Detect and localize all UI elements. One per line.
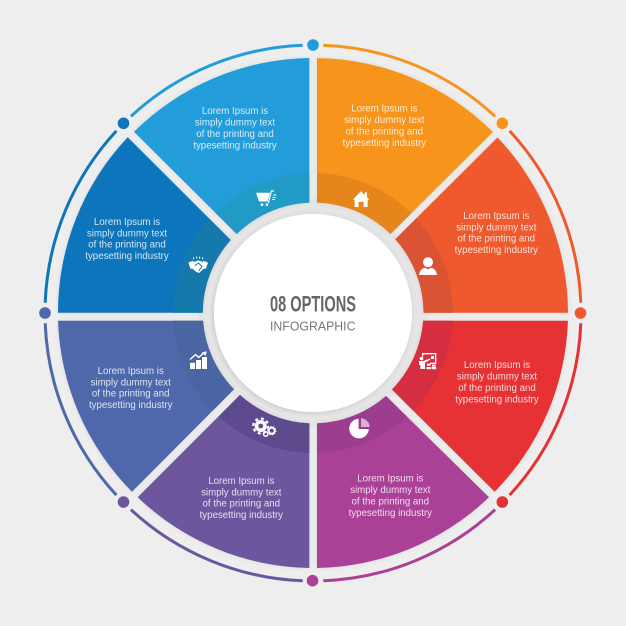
icon: house xyxy=(353,191,369,207)
text: steel blue: typesetting industry xyxy=(89,400,173,411)
ring dots xyxy=(39,39,586,586)
text: dark blue: typesetting industry xyxy=(85,251,169,262)
text: steel blue: Lorem Ipsum is xyxy=(98,366,164,377)
segment: orange-red xyxy=(395,138,568,313)
text: steel blue: simply dummy text xyxy=(91,377,171,388)
icon: presentation xyxy=(419,353,436,369)
segment: orange xyxy=(317,58,493,234)
center disc xyxy=(209,209,417,417)
icon: person xyxy=(419,257,437,275)
segments wheel xyxy=(58,58,568,568)
text: magenta: of the printing and xyxy=(352,496,429,507)
text: violet: typesetting industry xyxy=(200,510,283,521)
text: magenta: typesetting industry xyxy=(349,508,432,519)
icon: growth chart xyxy=(190,351,207,369)
segment: steel blue xyxy=(58,321,234,492)
text: blue: of the printing and xyxy=(196,129,274,140)
text: red: simply dummy text xyxy=(457,372,537,382)
text: red: of the printing and xyxy=(458,383,536,394)
segment: red xyxy=(392,321,568,492)
text: red: typesetting industry xyxy=(455,394,539,405)
text: orange: of the printing and xyxy=(346,126,423,137)
text: violet: of the printing and xyxy=(203,499,280,510)
text: magenta: simply dummy text xyxy=(350,485,431,496)
segment: violet xyxy=(138,395,309,568)
title: 08 OPTIONS xyxy=(270,292,356,317)
outer ring xyxy=(45,45,581,581)
text: orange: typesetting industry xyxy=(343,138,426,149)
text: orange-red: simply dummy text xyxy=(456,222,537,233)
text: violet: Lorem Ipsum is xyxy=(208,476,275,487)
icon: shopping cart xyxy=(256,191,276,206)
text: orange: Lorem Ipsum is xyxy=(351,104,418,114)
text: orange-red: of the printing and xyxy=(458,234,535,245)
text: dark blue: of the printing and xyxy=(88,240,166,251)
segment: blue xyxy=(134,58,309,234)
text: steel blue: of the printing and xyxy=(92,389,169,400)
text: orange-red: typesetting industry xyxy=(455,245,538,256)
segment: magenta xyxy=(317,396,489,568)
center disc ring xyxy=(201,201,425,425)
text: dark blue: Lorem Ipsum is xyxy=(94,217,160,228)
text: blue: Lorem Ipsum is xyxy=(202,106,268,117)
text: dark blue: simply dummy text xyxy=(87,228,167,239)
segment: dark blue xyxy=(58,137,231,313)
text: red: Lorem Ipsum is xyxy=(464,360,530,371)
icon: handshake xyxy=(188,257,208,273)
text: violet: simply dummy text xyxy=(201,487,282,498)
subtitle: INFOGRAPHIC xyxy=(270,319,356,334)
icon: gears xyxy=(253,419,276,436)
text: orange: simply dummy text xyxy=(344,115,425,126)
text: magenta: Lorem Ipsum is xyxy=(357,474,424,484)
icon: pie chart xyxy=(349,418,370,438)
text: orange-red: Lorem Ipsum is xyxy=(463,211,530,222)
text: blue: typesetting industry xyxy=(193,140,277,151)
text: blue: simply dummy text xyxy=(195,118,275,128)
